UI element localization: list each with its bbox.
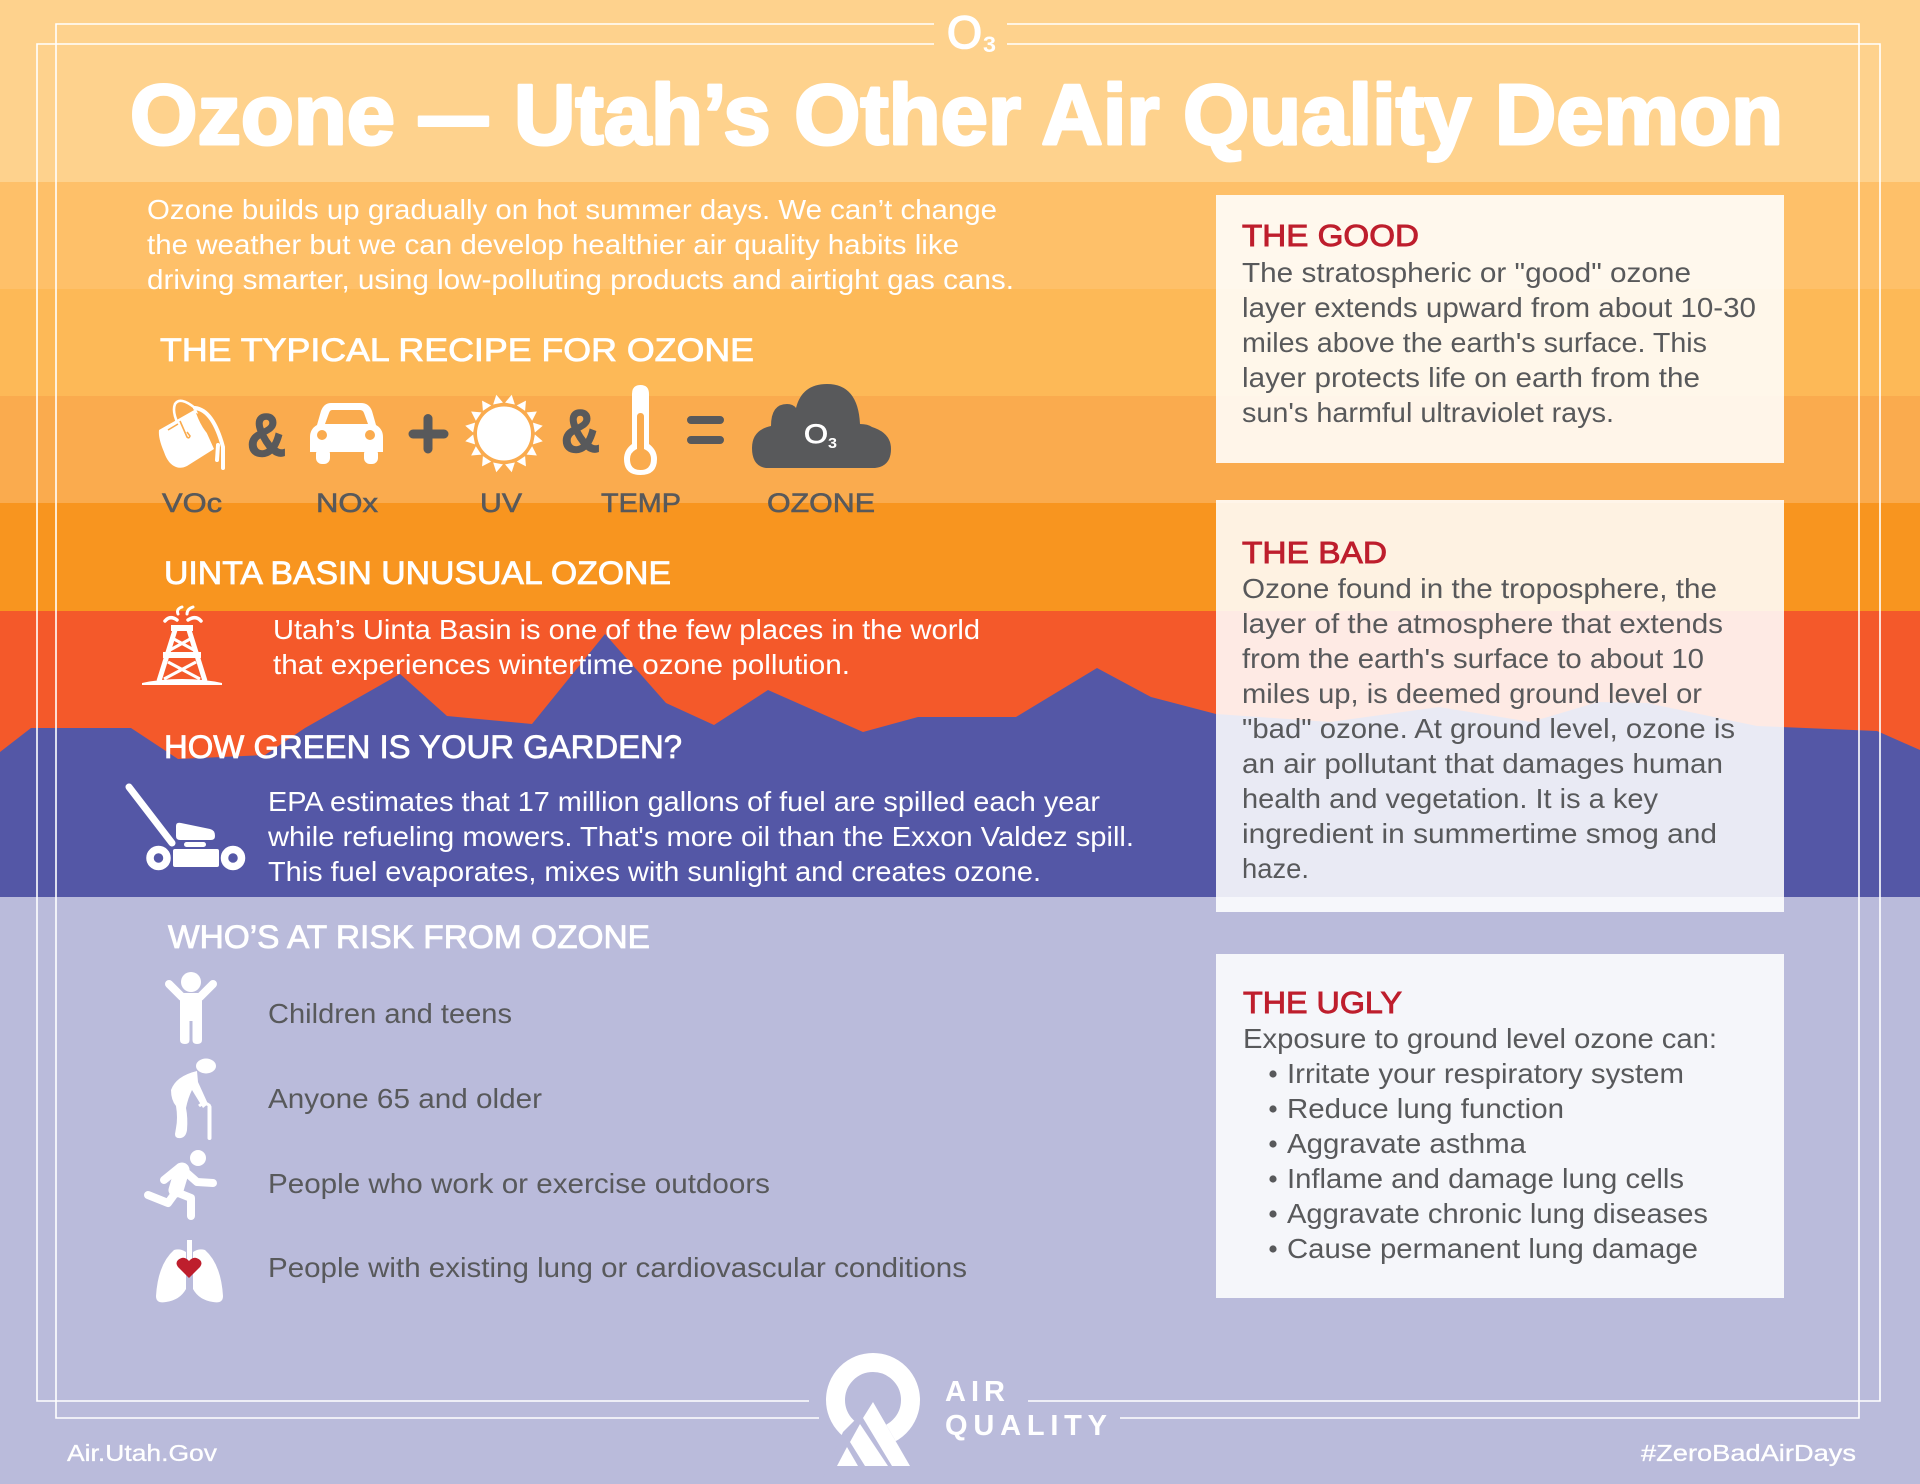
text: garden: while refueling mowers. That's more oil than the Exxon Valdez spill.	[267, 821, 1134, 852]
list: at-risk groups: People who work or exercise outdoors	[268, 1168, 770, 1199]
heading: garden: HOW GREEN IS YOUR GARDEN?	[164, 729, 682, 765]
intro text: the weather but we can develop healthier air quality habits like	[147, 229, 959, 260]
labels: recipe ingredients: NOx	[316, 488, 379, 518]
text: the good body: The stratospheric or "good" ozone	[1242, 257, 1691, 288]
intro text: Ozone builds up gradually on hot summer days. We can’t change	[147, 194, 997, 225]
labels: recipe ingredients: VOc	[162, 488, 222, 518]
text: the bad body: miles up, is deemed ground level or	[1242, 678, 1702, 709]
text: the good body	[1242, 257, 1756, 428]
text: the bad body: ingredient in summertime smog and	[1242, 818, 1717, 849]
footer: hashtag: #ZeroBadAirDays	[1641, 1440, 1856, 1466]
labels: recipe ingredients: TEMP	[601, 488, 681, 518]
title: Ozone	[130, 68, 395, 163]
text: the good body: layer protects life on earth from the	[1242, 362, 1700, 393]
list: ugly effects: Aggravate chronic lung diseases	[1287, 1198, 1708, 1229]
symbol: equals	[691, 420, 720, 440]
logo: Air Quality	[820, 1362, 1107, 1484]
list: ugly effects: Cause permanent lung damage	[1287, 1233, 1698, 1264]
icon: ozone cloud	[752, 384, 891, 468]
panel: the good	[1216, 195, 1784, 463]
text: the bad body: an air pollutant that damages human	[1242, 748, 1723, 779]
text: the bad body: from the earth's surface to about 10	[1242, 643, 1704, 674]
panel: the bad	[1216, 500, 1784, 912]
icon: paint can VOC	[159, 401, 223, 468]
logo: Air Quality: QUALITY	[945, 1410, 1107, 1442]
icon: child	[169, 972, 213, 1044]
icon: sun UV	[464, 394, 544, 473]
text: garden	[267, 786, 1134, 887]
intro text	[147, 194, 1014, 295]
title: —	[419, 68, 488, 163]
text: the bad body	[1242, 573, 1735, 884]
list: at-risk groups: Children and teens	[268, 998, 512, 1029]
icon: ozone cloud: 3	[828, 435, 837, 452]
text: the bad body: health and vegetation. It is a key	[1242, 783, 1658, 814]
text: the ugly intro: Exposure to ground level ozone can:	[1243, 1023, 1717, 1054]
symbol: ampersand: &	[247, 402, 286, 469]
list: at-risk groups	[268, 998, 967, 1283]
heading: who's at risk: WHO’S AT RISK FROM OZONE	[168, 919, 650, 955]
icon: O3 mark at top: 3	[983, 32, 996, 57]
icon: O3 mark at top: O	[947, 7, 982, 58]
icon: thermometer	[624, 385, 657, 475]
title: Utah’s Other Air Quality Demon	[514, 68, 1783, 163]
list: ugly effects	[1269, 1058, 1708, 1264]
text: the good body: layer extends upward from about 10-30	[1242, 292, 1756, 323]
labels: recipe ingredients	[162, 488, 875, 518]
footer: website: Air.Utah.Gov	[67, 1440, 218, 1466]
icon: oil derrick	[142, 607, 222, 685]
labels: recipe ingredients: UV	[480, 488, 522, 518]
icon: runner	[148, 1150, 213, 1216]
text: Uinta Basin	[273, 614, 980, 680]
labels: recipe ingredients: OZONE	[767, 488, 875, 518]
text: the bad body: Ozone found in the troposphere, the	[1242, 573, 1717, 604]
list: at-risk groups: Anyone 65 and older	[268, 1083, 542, 1114]
text: the bad body: layer of the atmosphere that extends	[1242, 608, 1723, 639]
icon: car NOx	[310, 403, 383, 464]
icon: lawn mower	[129, 787, 242, 867]
text: Uinta Basin: Utah’s Uinta Basin is one of the few places in the world	[273, 614, 980, 645]
list: ugly effects: Reduce lung function	[1287, 1093, 1564, 1124]
background: mountain silhouette	[0, 634, 1920, 897]
text: the bad body: haze.	[1242, 853, 1309, 884]
intro text: driving smarter, using low-polluting products and airtight gas cans.	[147, 264, 1014, 295]
text: garden: EPA estimates that 17 million gallons of fuel are spilled each year	[268, 786, 1100, 817]
list: ugly effects: Inflame and damage lung cells	[1287, 1163, 1684, 1194]
heading: the good: THE GOOD	[1242, 218, 1419, 253]
list: ugly effects: Aggravate asthma	[1287, 1128, 1527, 1159]
heading: the ugly: THE UGLY	[1243, 985, 1402, 1020]
text: Uinta Basin: that experiences wintertime ozone pollution.	[273, 649, 850, 680]
list: at-risk groups: People with existing lung or cardiovascular conditions	[268, 1252, 967, 1283]
panel: the ugly	[1216, 954, 1784, 1298]
icon: ozone cloud: O	[804, 419, 828, 449]
text: the good body: miles above the earth's surface. This	[1242, 327, 1707, 358]
symbol: ampersand: &	[561, 398, 600, 465]
icon: older adult	[171, 1058, 216, 1140]
heading: Uinta Basin: UINTA BASIN UNUSUAL OZONE	[164, 555, 671, 591]
text: the good body: sun's harmful ultraviolet rays.	[1242, 397, 1614, 428]
list: ugly effects: Irritate your respiratory system	[1287, 1058, 1684, 1089]
heading: the bad: THE BAD	[1242, 535, 1387, 570]
text: garden: This fuel evaporates, mixes with sunlight and creates ozone.	[268, 856, 1041, 887]
icon: lungs and heart	[156, 1240, 223, 1302]
symbol: plus	[413, 418, 444, 449]
text: the bad body: "bad" ozone. At ground level, ozone is	[1242, 713, 1735, 744]
logo: Air Quality: AIR	[945, 1376, 1005, 1408]
heading: recipe: THE TYPICAL RECIPE FOR OZONE	[160, 332, 754, 368]
